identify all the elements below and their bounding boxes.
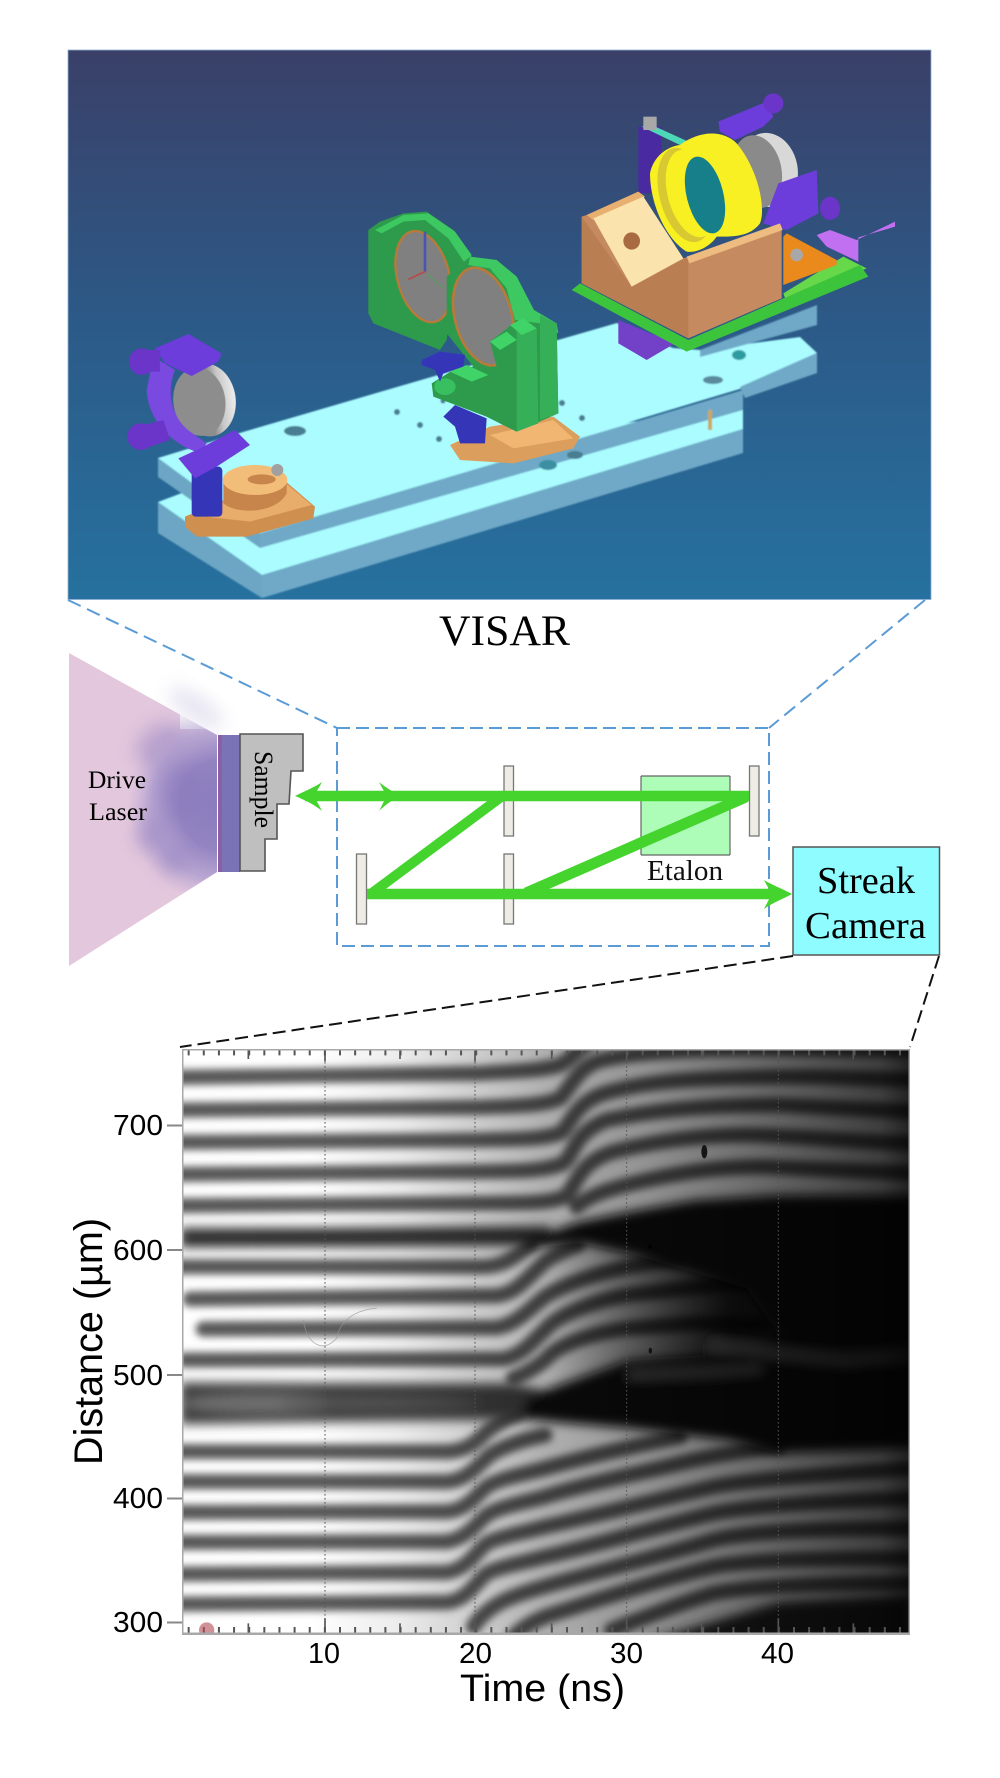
mount: center paired mirrors [368,212,580,463]
title: VISAR: VISAR [439,608,570,655]
arrow: to streak camera [764,880,792,909]
x axis labels: 20 [459,1638,492,1670]
x axis labels [308,1638,794,1670]
fringes [180,1043,913,1637]
streak camera box [793,847,940,955]
y axis labels: 700 [113,1110,163,1142]
y axis labels: 400 [113,1483,163,1515]
shock blackout regions [180,1195,920,1642]
tick marks [188,1050,910,1633]
panel: interferometer box [337,728,769,946]
label: Drive Laser [88,765,148,826]
laser beam paths [305,796,775,894]
mount: left mirror [127,334,315,537]
mirrors and beamsplitters [356,766,759,924]
ablator edge [218,735,222,872]
panel: VISAR 3D model render [68,50,931,600]
y axis ticks [167,1126,182,1622]
laser cone [69,653,217,966]
label: Streak Camera [805,860,926,947]
label: Sample: Sample [249,751,278,828]
y axis labels: 500 [113,1360,163,1392]
connector: VISAR zoom lines [68,600,925,728]
x axis labels: 10 [308,1638,340,1670]
y axis labels: 300 [113,1607,163,1639]
model background [68,50,931,600]
arrow: away from sample [379,782,400,811]
label: Drive Laser: Drive [88,765,146,794]
x axis labels: 30 [610,1638,643,1670]
y axis labels [113,1110,163,1639]
white notch [180,705,262,729]
darkening overlay [349,1050,908,1632]
optical table base plates [158,305,817,598]
x axis title: Time (ns) [460,1668,625,1710]
label: Drive Laser: Laser [89,797,148,826]
ablator layer [218,735,240,872]
mount: right etalon housing [572,93,895,360]
plasma plume [130,716,217,890]
sample block [240,734,303,871]
connector: camera to streak image [180,956,939,1047]
etalon [641,776,730,855]
panel: drive laser cone [69,653,224,966]
chart: streak camera fringe image [180,1043,920,1642]
time gridlines [325,1050,778,1633]
y axis labels: 600 [113,1235,163,1267]
arrow: toward sample [295,782,322,811]
label: Streak Camera: Camera [805,905,926,947]
x axis labels: 40 [761,1638,794,1670]
image frame [182,1049,910,1634]
label: Streak Camera: Streak [817,860,916,902]
image artefacts [199,1145,707,1638]
label: Etalon: Etalon [647,856,723,887]
y axis title: Distance (µm) [67,1218,111,1465]
faint plume above cone [163,680,229,736]
